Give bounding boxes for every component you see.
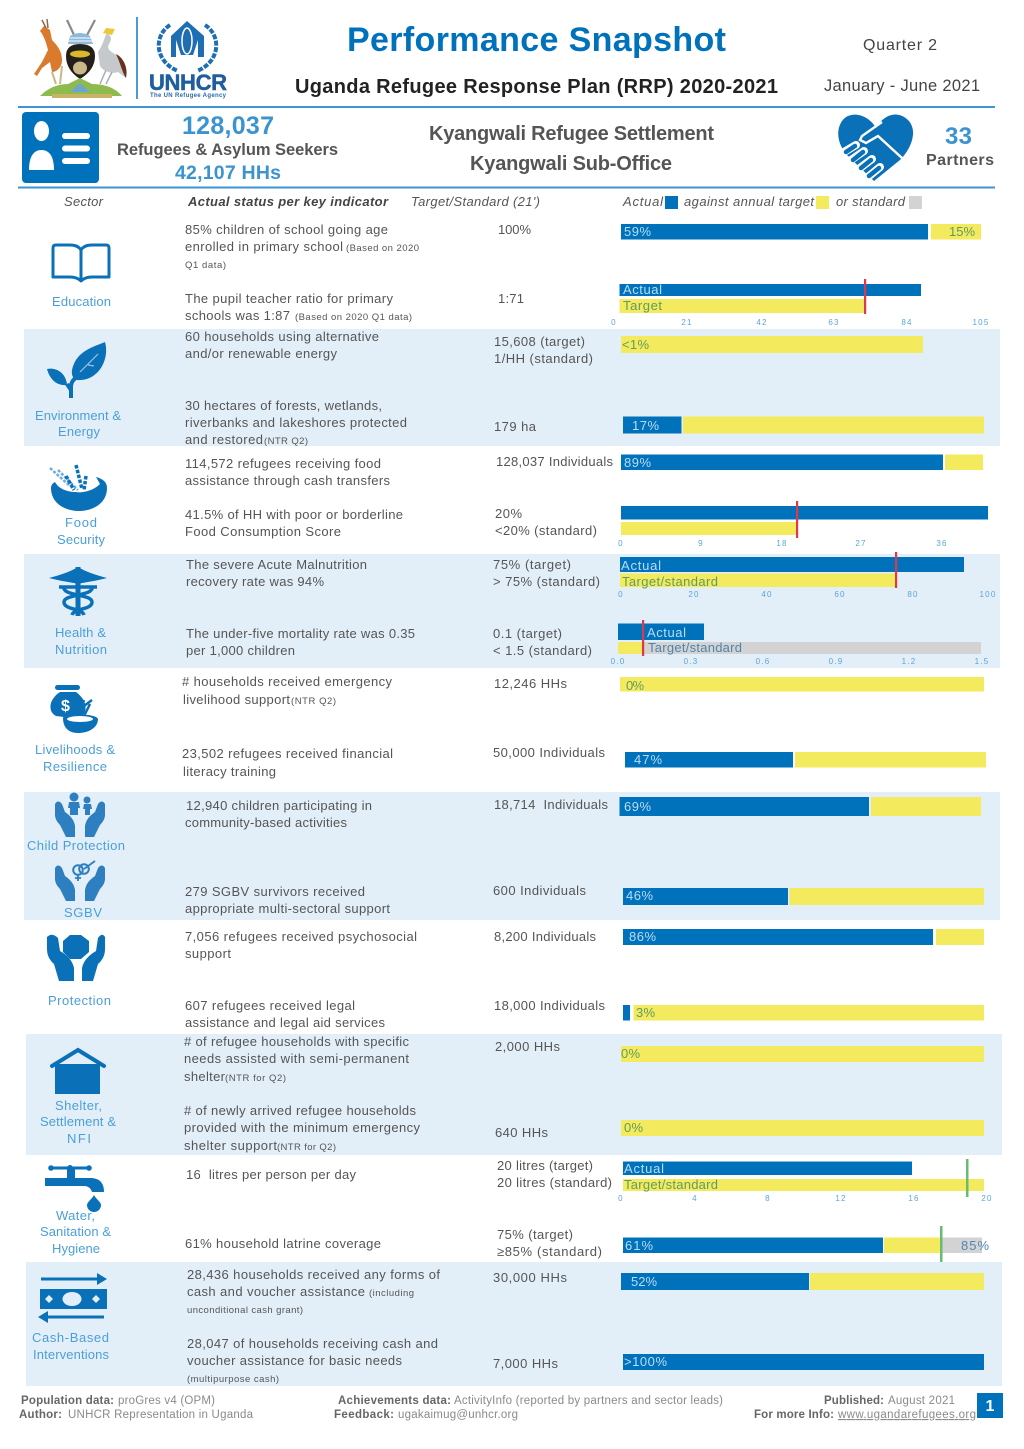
icon: person card bbox=[22, 112, 99, 183]
footer: publication bbox=[754, 1395, 976, 1421]
chart: malnutrition recovery: 60 bbox=[834, 590, 846, 599]
indicator: emergency shelter: provided with the minimum emergency bbox=[184, 1120, 420, 1135]
sector label: Security bbox=[57, 532, 106, 547]
chart: pupil teacher ratio: 42 bbox=[756, 318, 768, 327]
indicator: any cash and voucher: (including bbox=[369, 1288, 414, 1299]
indicator: emergency shelter: 640 HHs bbox=[495, 1125, 548, 1140]
sector label: Nutrition bbox=[55, 642, 107, 657]
indicator: SGBV survivors: appropriate multi-sectoral support bbox=[185, 901, 390, 916]
indicator: emergency livelihood: (NTR Q2) bbox=[291, 696, 336, 707]
partners count bbox=[926, 123, 994, 169]
icon: money bag and bowl: $ bbox=[61, 698, 70, 715]
bar: hectares restored bbox=[623, 416, 984, 434]
sector label bbox=[35, 408, 121, 439]
partners count: 33 bbox=[945, 123, 972, 150]
sector label bbox=[57, 515, 106, 547]
bar: psychosocial support bbox=[623, 929, 984, 945]
bar: renewable energy bbox=[621, 336, 923, 353]
logo: UNHCR: UNHCR bbox=[149, 70, 227, 95]
indicator: emergency livelihood bbox=[182, 674, 568, 707]
table header and legend bbox=[64, 194, 922, 209]
panel: Shelter, Settlement & NFI bbox=[26, 1034, 1002, 1155]
table header and legend: Actual bbox=[622, 194, 664, 209]
chart: pupil teacher ratio: 21 bbox=[681, 318, 693, 327]
footer: publication: Published: bbox=[824, 1395, 884, 1407]
indicator: any cash and voucher: cash and voucher assistance bbox=[187, 1284, 365, 1299]
settlement name: Kyangwali Sub-Office bbox=[470, 153, 672, 175]
table header and legend: against annual target bbox=[684, 194, 815, 209]
indicator: cash transfers: 128,037 Individuals bbox=[496, 454, 614, 469]
footer: data sources: Population data: bbox=[21, 1395, 114, 1407]
indicator: SGBV survivors: 279 SGBV survivors received bbox=[185, 884, 365, 899]
indicator: semi-permanent shelter: needs assisted with semi-permanent bbox=[184, 1051, 409, 1066]
table header and legend: or standard bbox=[836, 194, 906, 209]
footer: achievements: Achievements data: bbox=[338, 1395, 451, 1407]
chart: litres per day: 16 bbox=[908, 1194, 920, 1203]
table header and legend: Sector bbox=[64, 194, 104, 209]
bar: legal assistance bbox=[623, 1005, 984, 1020]
indicator: psychosocial support bbox=[185, 929, 596, 961]
indicator: cash transfers: 114,572 refugees receiving food bbox=[185, 456, 381, 471]
indicator: food consumption: Food Consumption Score bbox=[185, 524, 341, 539]
indicator: legal assistance: assistance and legal aid services bbox=[185, 1015, 386, 1030]
indicator: latrine coverage: 61% household latrine coverage bbox=[185, 1236, 381, 1251]
footer: achievements: ugakaimug@unhcr.org bbox=[398, 1409, 518, 1421]
indicator: under-five mortality bbox=[186, 626, 592, 658]
bar: semi-permanent shelter: 0% bbox=[621, 1046, 640, 1061]
sector label: Water, bbox=[56, 1208, 95, 1223]
panel: Education bbox=[52, 222, 989, 327]
summary strip bbox=[22, 112, 994, 184]
chart: pupil teacher ratio: Actual bbox=[623, 282, 662, 297]
indicator: multipurpose cash bbox=[187, 1336, 558, 1385]
indicator: under-five mortality: 0.1 (target) bbox=[493, 626, 562, 641]
footer: data sources: Author: bbox=[19, 1409, 62, 1421]
chart: under-five mortality: 1.5 bbox=[975, 657, 989, 666]
icon: handshake heart bbox=[838, 114, 913, 181]
sector label bbox=[40, 1098, 116, 1146]
icon: bowl with wheat bbox=[50, 465, 107, 511]
indicator: child participation: 12,940 children participating in bbox=[186, 798, 372, 813]
chart: pupil teacher ratio: 0 bbox=[611, 318, 617, 327]
footer: publication: August 2021 bbox=[888, 1395, 955, 1407]
bar: child participation: 69% bbox=[624, 799, 651, 814]
sector label: Environment & bbox=[35, 408, 121, 423]
sector label: Settlement & bbox=[40, 1114, 116, 1129]
chart: food consumption bbox=[618, 501, 988, 548]
bar: child participation bbox=[620, 797, 981, 816]
indicator: legal assistance: 607 refugees received legal bbox=[185, 998, 355, 1013]
footer: achievements: ActivityInfo (reported by partners and sector leads) bbox=[454, 1395, 723, 1407]
indicator: renewable energy: and/or renewable energy bbox=[185, 346, 338, 361]
panel: Food Security bbox=[50, 454, 988, 548]
indicator: emergency shelter bbox=[184, 1103, 548, 1153]
chart: pupil teacher ratio: Target bbox=[623, 298, 662, 313]
indicator: emergency shelter: shelter support bbox=[184, 1138, 277, 1153]
indicator: food consumption: 41.5% of HH with poor or borderline bbox=[185, 507, 403, 522]
indicator: multipurpose cash: 7,000 HHs bbox=[493, 1356, 558, 1371]
bar: any cash and voucher bbox=[621, 1273, 984, 1290]
chart: litres per day bbox=[618, 1159, 993, 1203]
chart: malnutrition recovery: Actual bbox=[621, 558, 661, 573]
indicator: SGBV survivors: 600 Individuals bbox=[493, 883, 586, 898]
chart: under-five mortality bbox=[611, 620, 989, 666]
indicator: malnutrition recovery: The severe Acute Malnutrition bbox=[186, 557, 367, 572]
indicator: psychosocial support: support bbox=[185, 946, 231, 961]
population figures bbox=[117, 112, 338, 184]
indicator: semi-permanent shelter: (NTR for Q2) bbox=[225, 1073, 286, 1084]
sector label bbox=[40, 1208, 111, 1256]
indicator: malnutrition recovery: recovery rate was 94% bbox=[186, 574, 324, 589]
indicator: enrolment: Q1 data) bbox=[185, 260, 226, 271]
indicator: hectares restored: 30 hectares of forests, wetlands, bbox=[185, 398, 382, 413]
indicator: renewable energy: 60 households using alternative bbox=[185, 329, 379, 344]
chart: litres per day: 0 bbox=[618, 1194, 624, 1203]
chart: food consumption: 9 bbox=[698, 539, 704, 548]
indicator: enrolment: 100% bbox=[498, 222, 531, 237]
indicator: financial literacy: 50,000 Individuals bbox=[493, 745, 606, 760]
sector label: NFI bbox=[67, 1131, 91, 1146]
logo: UNHCR bbox=[149, 21, 227, 99]
title: Performance Snapshot bbox=[347, 21, 726, 59]
icon: hands around person bbox=[47, 935, 105, 981]
indicator: latrine coverage bbox=[185, 1227, 602, 1259]
footer: data sources: UNHCR Representation in Uganda bbox=[68, 1409, 254, 1421]
chart: malnutrition recovery: Target/standard bbox=[622, 574, 718, 589]
population figures: 42,107 HHs bbox=[175, 162, 281, 184]
indicator: under-five mortality: The under-five mortality rate was 0.35 bbox=[186, 626, 415, 641]
subtitle: Uganda Refugee Response Plan (RRP) 2020-2021 bbox=[295, 76, 778, 98]
indicator: emergency livelihood: 12,246 HHs bbox=[494, 676, 568, 691]
bar: semi-permanent shelter bbox=[621, 1046, 984, 1062]
panel: Cash-Based Interventions bbox=[26, 1262, 1002, 1386]
bar: multipurpose cash bbox=[623, 1354, 984, 1370]
indicator: hectares restored: (NTR Q2) bbox=[264, 436, 308, 447]
indicator: pupil teacher ratio: (Based on 2020 Q1 data) bbox=[295, 312, 412, 323]
bar: psychosocial support: 86% bbox=[629, 929, 656, 944]
table header and legend: Actual status per key indicator bbox=[187, 194, 389, 209]
chart: under-five mortality: Actual bbox=[647, 625, 686, 640]
panel: Protection bbox=[47, 929, 984, 1030]
sector label bbox=[35, 742, 115, 774]
chart: litres per day: 20 bbox=[981, 1194, 993, 1203]
indicator: child participation: community-based activities bbox=[185, 815, 348, 830]
sector label: Resilience bbox=[43, 759, 107, 774]
icon: money bag and bowl bbox=[50, 685, 98, 733]
indicator: under-five mortality: per 1,000 children bbox=[186, 643, 295, 658]
indicator: pupil teacher ratio: schools was 1:87 bbox=[185, 308, 290, 323]
chart: food consumption: 0 bbox=[618, 539, 624, 548]
population figures: 128,037 bbox=[182, 112, 274, 140]
chart: malnutrition recovery: 20 bbox=[688, 590, 700, 599]
indicator: pupil teacher ratio: The pupil teacher ratio for primary bbox=[185, 291, 394, 306]
sector label: SGBV: SGBV bbox=[64, 905, 102, 920]
bar: SGBV survivors: 46% bbox=[626, 888, 653, 903]
chart: litres per day: 8 bbox=[765, 1194, 771, 1203]
page number bbox=[977, 1393, 1003, 1418]
indicator: SGBV survivors bbox=[185, 883, 586, 916]
indicator: latrine coverage: ≥85% (standard) bbox=[497, 1244, 602, 1259]
indicator: cash transfers: assistance through cash transfers bbox=[185, 473, 390, 488]
chart: under-five mortality: 1.2 bbox=[902, 657, 916, 666]
footer: publication: For more Info: bbox=[754, 1409, 834, 1421]
icon: hands protecting children bbox=[55, 792, 105, 837]
indicator: psychosocial support: 8,200 Individuals bbox=[494, 929, 596, 944]
chart: pupil teacher ratio: 63 bbox=[828, 318, 840, 327]
chart: under-five mortality: 0.9 bbox=[829, 657, 843, 666]
panel: Livelihoods & Resilience bbox=[35, 674, 986, 779]
chart: food consumption: 27 bbox=[855, 539, 867, 548]
indicator: enrolment: enrolled in primary school bbox=[185, 239, 343, 254]
chart: food consumption: 36 bbox=[936, 539, 948, 548]
rule above summary bbox=[18, 106, 995, 108]
indicator: emergency livelihood: livelihood support bbox=[183, 692, 290, 707]
chart: malnutrition recovery bbox=[618, 552, 996, 599]
bar: emergency shelter bbox=[621, 1120, 984, 1136]
footer: publication: www.ugandarefugees.org bbox=[837, 1409, 976, 1421]
indicator: any cash and voucher bbox=[187, 1267, 568, 1316]
indicator: legal assistance: 18,000 Individuals bbox=[494, 998, 606, 1013]
population figures: Refugees & Asylum Seekers bbox=[117, 141, 338, 159]
chart: under-five mortality: Target/standard bbox=[648, 640, 742, 655]
indicator: emergency shelter: (NTR for Q2) bbox=[277, 1142, 336, 1153]
indicator: psychosocial support: 7,056 refugees received psychosocial bbox=[185, 929, 417, 944]
footer: achievements bbox=[334, 1395, 723, 1421]
indicator: malnutrition recovery bbox=[186, 557, 600, 589]
indicator: malnutrition recovery: 75% (target) bbox=[493, 557, 571, 572]
sector label: Livelihoods & bbox=[35, 742, 115, 757]
indicator: hectares restored: riverbanks and lakeshores protected bbox=[185, 415, 407, 430]
footer: data sources: proGres v4 (OPM) bbox=[118, 1395, 215, 1407]
icon: house bbox=[52, 1050, 104, 1094]
indicator: child participation bbox=[185, 797, 608, 830]
sector label: Education bbox=[52, 294, 111, 309]
icon: hands protecting gender symbol bbox=[55, 861, 105, 901]
indicator: hectares restored bbox=[185, 398, 537, 447]
indicator: food consumption bbox=[185, 506, 597, 539]
indicator: multipurpose cash: voucher assistance for basic needs bbox=[187, 1353, 402, 1368]
indicator: renewable energy: 15,608 (target) bbox=[494, 334, 585, 349]
chart: under-five mortality: 0.0 bbox=[611, 657, 625, 666]
chart: malnutrition recovery: 40 bbox=[761, 590, 773, 599]
chart: litres per day: Target/standard bbox=[624, 1177, 718, 1192]
indicator: financial literacy bbox=[182, 745, 606, 779]
indicator: food consumption: 20% bbox=[495, 506, 522, 521]
footer: data sources bbox=[19, 1395, 254, 1421]
indicator: child participation: 18,714 Individuals bbox=[494, 797, 608, 812]
bar: financial literacy bbox=[625, 752, 986, 768]
icon: banknote with arrows bbox=[38, 1273, 107, 1323]
quarter: Quarter 2 bbox=[863, 37, 937, 54]
indicator: enrolment: (Based on 2020 bbox=[346, 243, 419, 254]
chart: latrine coverage: 85% bbox=[961, 1238, 989, 1253]
icon: tap with drop bbox=[45, 1165, 104, 1212]
chart: litres per day: Actual bbox=[624, 1161, 664, 1176]
chart: under-five mortality: 0.6 bbox=[756, 657, 770, 666]
bar: cash transfers bbox=[621, 454, 983, 470]
bar: enrolment: 59% bbox=[624, 224, 651, 239]
divider line between logos bbox=[136, 17, 138, 99]
indicator: hectares restored: 179 ha bbox=[494, 419, 537, 434]
partners count: Partners bbox=[926, 152, 994, 169]
bar: any cash and voucher: 52% bbox=[631, 1274, 657, 1289]
footer bbox=[19, 1393, 1003, 1421]
indicator: litres per day: 16 litres per person per day bbox=[186, 1167, 356, 1182]
sector label: Health & bbox=[55, 625, 106, 640]
indicator: pupil teacher ratio: 1:71 bbox=[498, 291, 524, 306]
icon: caduceus bbox=[49, 567, 107, 616]
indicator: financial literacy: literacy training bbox=[183, 764, 276, 779]
panel: Health & Nutrition bbox=[24, 552, 1000, 668]
period: January - June 2021 bbox=[824, 77, 980, 95]
indicator: semi-permanent shelter bbox=[184, 1034, 560, 1084]
logo: Uganda coat of arms bbox=[34, 19, 127, 98]
bar: hectares restored: 17% bbox=[632, 418, 659, 433]
chart: pupil teacher ratio: 105 bbox=[973, 318, 989, 327]
indicator: latrine coverage: 75% (target) bbox=[497, 1227, 573, 1242]
bar: enrolment: 15% bbox=[949, 224, 975, 239]
logo: UNHCR: The UN Refugee Agency bbox=[150, 93, 227, 99]
bar: emergency shelter: 0% bbox=[624, 1120, 643, 1135]
panel: Water, Sanitation & Hygiene bbox=[40, 1158, 993, 1264]
indicator: food consumption: <20% (standard) bbox=[495, 523, 597, 538]
sector label bbox=[32, 1330, 110, 1362]
bar: enrolment bbox=[621, 224, 981, 240]
indicator: multipurpose cash: 28,047 of households receiving cash and bbox=[187, 1336, 438, 1351]
chart: malnutrition recovery: 0 bbox=[618, 590, 624, 599]
chart: litres per day: 4 bbox=[692, 1194, 698, 1203]
indicator: malnutrition recovery: > 75% (standard) bbox=[493, 574, 600, 589]
icon: open book bbox=[53, 245, 109, 281]
indicator: legal assistance bbox=[185, 998, 606, 1030]
indicator: any cash and voucher: 28,436 households received any forms of bbox=[187, 1267, 440, 1282]
indicator: multipurpose cash: (multipurpose cash) bbox=[187, 1374, 279, 1385]
indicator: litres per day: 20 litres (target) bbox=[497, 1158, 593, 1173]
chart: litres per day: 12 bbox=[835, 1194, 847, 1203]
footer: achievements: Feedback: bbox=[334, 1409, 394, 1421]
indicator: cash transfers bbox=[185, 454, 614, 488]
bar: legal assistance: 3% bbox=[636, 1005, 655, 1020]
chart: latrine coverage bbox=[623, 1226, 989, 1264]
indicator: any cash and voucher: 30,000 HHs bbox=[493, 1270, 568, 1285]
bar: financial literacy: 47% bbox=[634, 752, 662, 767]
chart: malnutrition recovery: 80 bbox=[907, 590, 919, 599]
sector label: Food bbox=[65, 515, 97, 530]
bar: emergency livelihood bbox=[620, 677, 984, 693]
indicator: renewable energy: 1/HH (standard) bbox=[494, 351, 593, 366]
sector label: Sanitation & bbox=[40, 1224, 111, 1239]
indicator: hectares restored: and restored bbox=[185, 432, 263, 447]
settlement name bbox=[429, 123, 714, 175]
indicator: litres per day bbox=[186, 1158, 612, 1190]
table header and legend: Target/Standard (21') bbox=[411, 194, 540, 209]
indicator: under-five mortality: < 1.5 (standard) bbox=[493, 643, 592, 658]
indicator: financial literacy: 23,502 refugees received financial bbox=[182, 746, 393, 761]
chart: malnutrition recovery: 100 bbox=[980, 590, 996, 599]
panel: Child Protection and SGBV bbox=[24, 792, 1000, 920]
sector label: Cash-Based bbox=[32, 1330, 109, 1345]
chart: under-five mortality: 0.3 bbox=[684, 657, 698, 666]
indicator: emergency livelihood: # households received emergency bbox=[182, 674, 392, 689]
indicator: emergency shelter: # of newly arrived refugee households bbox=[184, 1103, 416, 1118]
indicator: renewable energy bbox=[185, 329, 593, 366]
chart: food consumption: 18 bbox=[776, 539, 788, 548]
indicator: any cash and voucher: unconditional cash grant) bbox=[187, 1305, 303, 1316]
settlement name: Kyangwali Refugee Settlement bbox=[429, 123, 714, 145]
indicator: enrolment: 85% children of school going age bbox=[185, 222, 388, 237]
chart: pupil teacher ratio bbox=[611, 279, 989, 327]
sector label: Shelter, bbox=[55, 1098, 102, 1113]
sector label: Energy bbox=[58, 424, 100, 439]
header bbox=[34, 17, 980, 99]
sector label bbox=[55, 625, 107, 657]
chart: pupil teacher ratio: 84 bbox=[901, 318, 913, 327]
sector label: Interventions bbox=[33, 1347, 110, 1362]
indicator: litres per day: 20 litres (standard) bbox=[497, 1175, 612, 1190]
indicator: enrolment bbox=[185, 222, 531, 271]
bar: SGBV survivors bbox=[623, 888, 984, 905]
panel: Environment & Energy bbox=[24, 329, 1000, 447]
indicator: semi-permanent shelter: 2,000 HHs bbox=[495, 1039, 560, 1054]
sector label: child protection: Child Protection bbox=[27, 838, 125, 853]
bar: emergency livelihood: 0% bbox=[626, 678, 644, 693]
sector label: Protection bbox=[48, 993, 111, 1008]
icon: plant leaf bbox=[47, 342, 106, 398]
page number: 1 bbox=[986, 1398, 995, 1415]
rule below summary bbox=[18, 186, 995, 188]
sector label: Hygiene bbox=[52, 1241, 100, 1256]
bar: multipurpose cash: >100% bbox=[624, 1354, 667, 1369]
bar: cash transfers: 89% bbox=[624, 455, 651, 470]
indicator: pupil teacher ratio bbox=[185, 291, 524, 323]
indicator: semi-permanent shelter: # of refugee households with specific bbox=[184, 1034, 410, 1049]
indicator: semi-permanent shelter: shelter bbox=[184, 1069, 226, 1084]
chart: latrine coverage: 61% bbox=[625, 1238, 653, 1253]
bar: renewable energy: <1% bbox=[622, 337, 649, 352]
